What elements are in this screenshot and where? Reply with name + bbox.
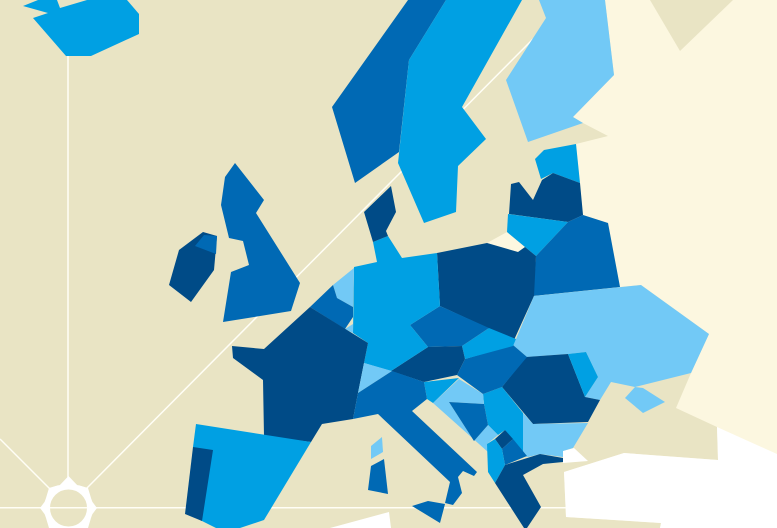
Corsica <box>371 437 383 459</box>
Estonia <box>535 144 580 183</box>
Crimea <box>625 387 665 413</box>
Northern Ireland <box>195 235 217 254</box>
United Kingdom <box>221 163 300 322</box>
Romania <box>502 354 600 424</box>
Austria <box>391 346 465 382</box>
grid lines and compass <box>0 39 566 528</box>
Ireland <box>169 232 217 302</box>
Sicily <box>412 501 445 523</box>
Lithuania <box>507 214 568 256</box>
Slovenia <box>424 378 459 403</box>
Bosnia <box>449 402 488 441</box>
North Macedonia <box>502 439 527 465</box>
Spain <box>193 424 311 528</box>
Serbia <box>483 387 523 456</box>
north sea triangle <box>650 0 733 51</box>
white region: Turkey and Middle East <box>564 427 777 528</box>
white region: north Africa <box>330 512 391 528</box>
Greece <box>495 454 563 528</box>
Slovakia <box>462 328 516 359</box>
France <box>232 307 368 442</box>
Sweden <box>398 0 522 223</box>
Croatia <box>433 379 498 452</box>
Finland <box>506 0 614 142</box>
Sardinia <box>368 459 388 494</box>
Kosovo <box>495 430 513 449</box>
Luxembourg <box>345 324 353 333</box>
Moldova <box>568 352 598 397</box>
Belarus <box>533 215 620 296</box>
Denmark <box>364 186 396 242</box>
Belgium <box>310 285 353 329</box>
Poland <box>437 243 536 340</box>
Ukraine <box>513 285 709 400</box>
Switzerland <box>358 363 392 393</box>
Czech Republic <box>410 306 489 347</box>
Latvia <box>509 173 583 222</box>
Italy <box>353 371 477 505</box>
Norway <box>332 0 446 183</box>
cream region: Kaliningrad <box>487 232 525 252</box>
Iceland <box>23 0 139 56</box>
Portugal <box>185 447 213 521</box>
Germany <box>353 236 440 371</box>
Bulgaria <box>523 413 588 457</box>
Albania <box>487 439 505 483</box>
Hungary <box>457 345 527 394</box>
white region: Istanbul strait <box>563 448 588 463</box>
Netherlands <box>333 268 354 307</box>
